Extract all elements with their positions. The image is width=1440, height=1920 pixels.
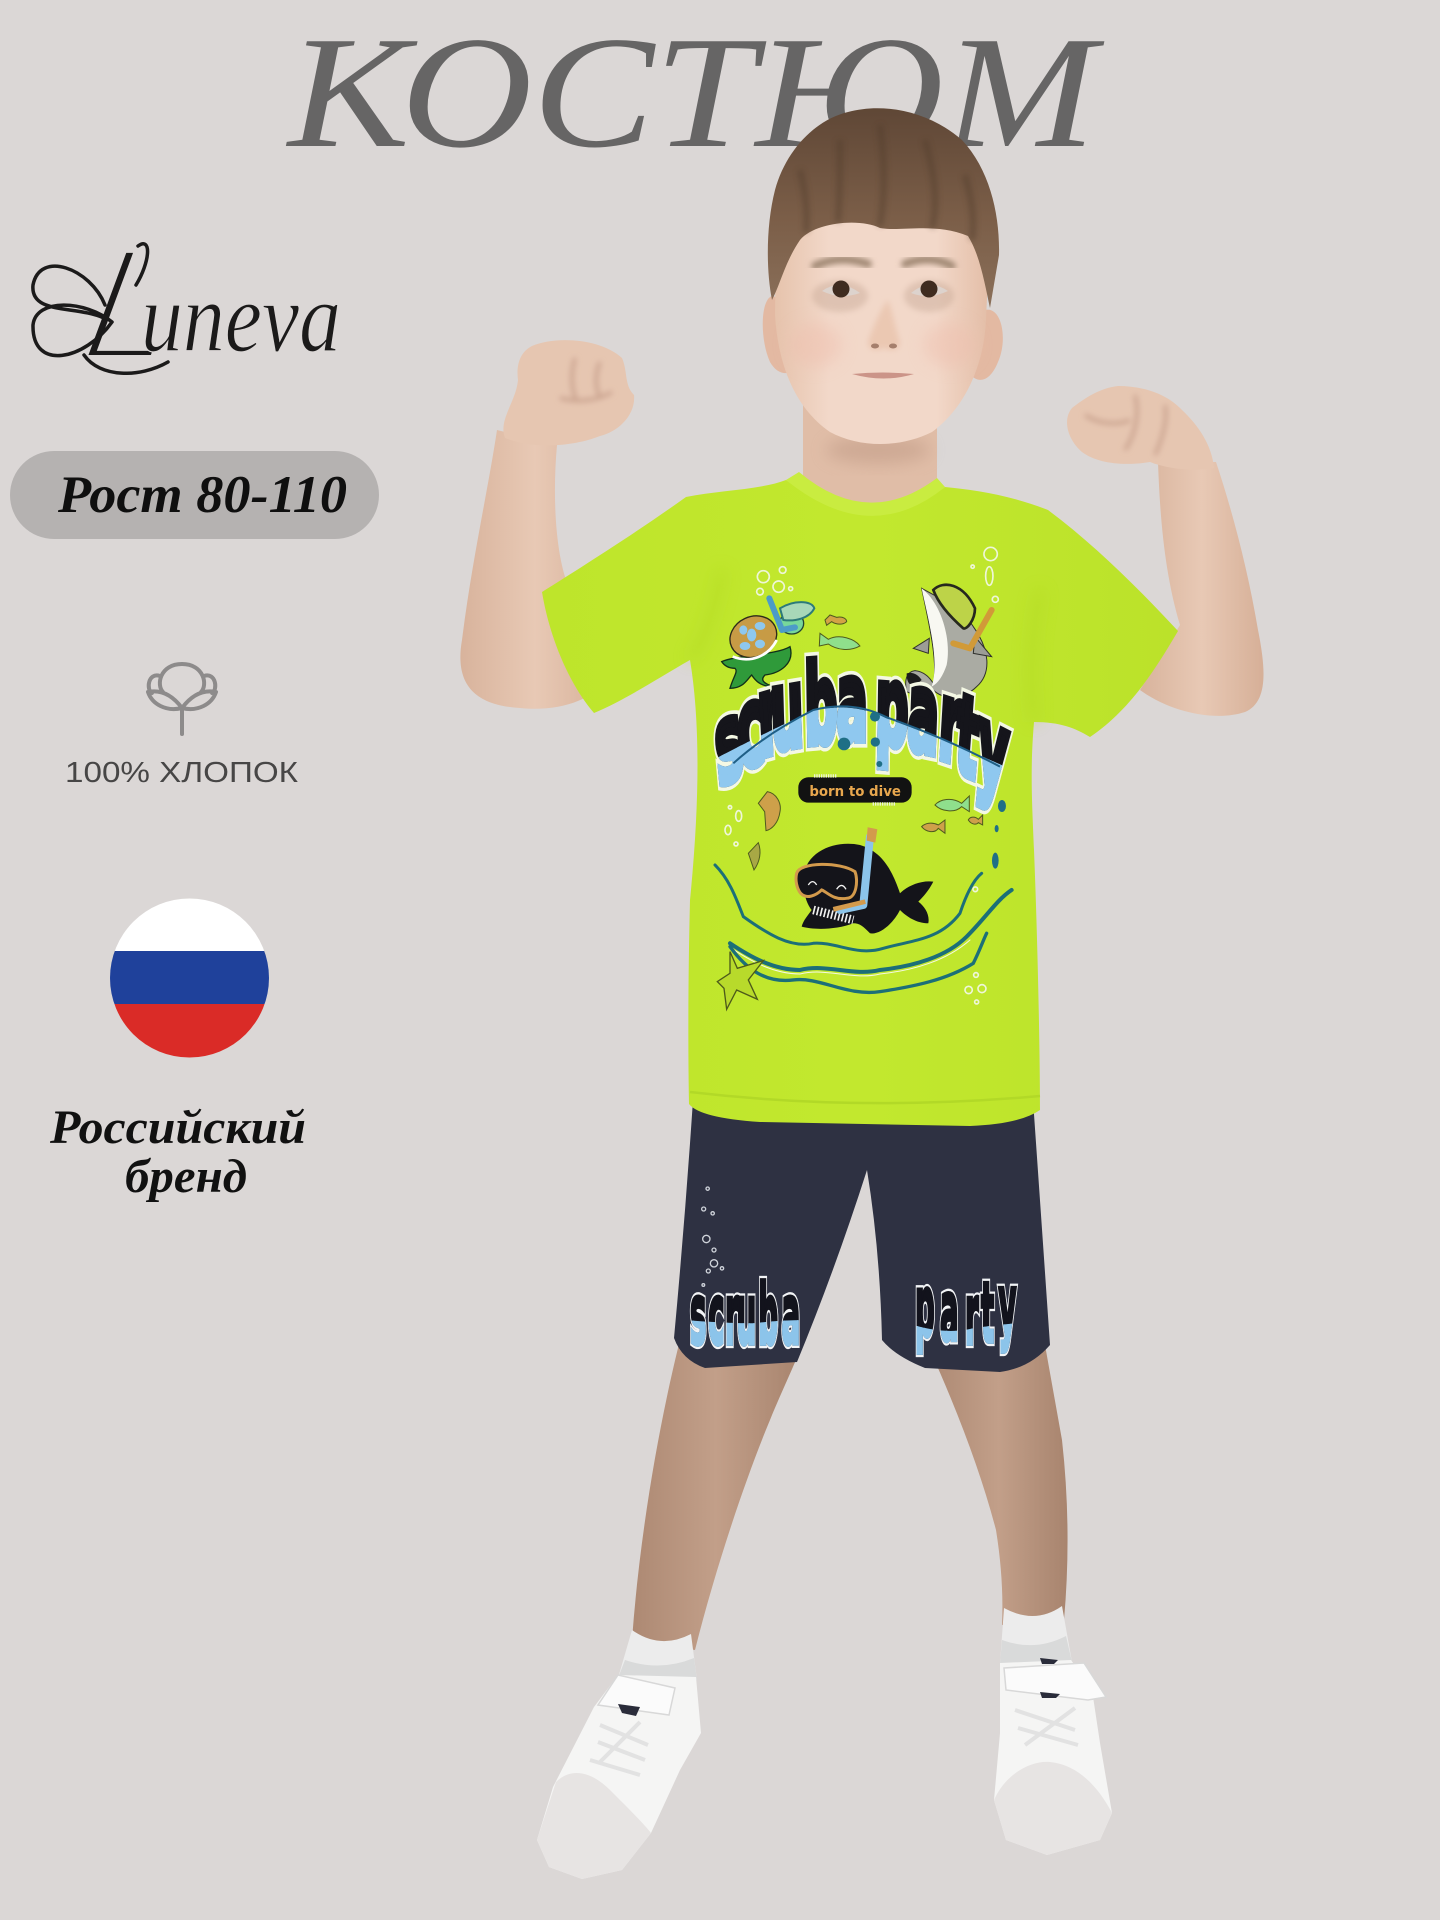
brand logo: Luneva: uneva: [141, 262, 341, 373]
lettering: scruba party: scruba party: [709, 638, 1013, 819]
shorts print: scruba: scruba: [690, 1265, 800, 1363]
brand logo: Luneva: L: [72, 215, 192, 394]
t-shirt: [542, 472, 1178, 1126]
right sock: [1000, 1606, 1072, 1664]
lettering: scruba party: scruba party: [709, 638, 1013, 819]
icon: cotton flower: [148, 664, 216, 734]
hair: [768, 108, 999, 308]
shorts print: party: party: [915, 1255, 1016, 1363]
starfish: [717, 952, 763, 1009]
mouth: [852, 372, 914, 378]
eye sockets: [812, 280, 868, 312]
left arm: [460, 430, 610, 709]
left leg: [632, 1340, 800, 1650]
right arm: [1140, 462, 1264, 716]
icon: russian flag: [110, 898, 269, 1058]
t-shirt collar: [786, 472, 945, 516]
lettering: scruba party: scruba party: [709, 638, 1013, 819]
whale: [796, 827, 933, 933]
shorts: [674, 1100, 1050, 1372]
sleeve shading: [690, 570, 1040, 722]
cheeks: [789, 323, 841, 367]
right leg: [930, 1345, 1068, 1625]
height badge: [10, 451, 379, 539]
cotton label: 100% ХЛОПОК: [65, 757, 298, 789]
waves: [715, 865, 1012, 992]
fish: [748, 615, 983, 870]
left sock: [618, 1630, 697, 1680]
left shoe: [537, 1675, 701, 1879]
russian brand label: [49, 1101, 306, 1203]
hem line: [690, 1092, 1040, 1103]
boy figure: [460, 108, 1264, 1879]
left ear: [763, 296, 796, 373]
height badge: Рост 80-110: [57, 466, 347, 524]
title: КОСТЮМ: [286, 3, 1105, 181]
brand logo: Luneva: [33, 215, 341, 394]
russian brand label: Российский: [49, 1101, 306, 1154]
turtle: [722, 598, 814, 688]
chin shadow: [826, 436, 930, 464]
shorts print: party: party: [915, 1255, 1016, 1363]
right fist: [1067, 386, 1214, 470]
shorts print: scruba: scruba: [690, 1265, 800, 1363]
shorts print: scruba: [690, 1276, 1018, 1358]
shorts print: scruba: scruba: [690, 1265, 800, 1363]
face: [775, 208, 990, 444]
russian brand label: бренд: [125, 1150, 247, 1203]
born to dive badge: [798, 776, 912, 804]
left eye: [822, 280, 860, 298]
shorts print: bubbles: [702, 1187, 724, 1286]
bubbles: [725, 547, 998, 1004]
born to dive badge: born to dive: [809, 784, 901, 800]
right eye: [911, 280, 948, 298]
dolphin: [906, 585, 992, 697]
eyebrows: [815, 259, 868, 266]
neck: [803, 395, 937, 511]
right ear: [970, 310, 1003, 380]
left fist: [503, 340, 634, 445]
shirt print: [709, 547, 1013, 1009]
shorts print: scruba: party: [915, 1255, 1016, 1363]
waterline and drops: [733, 706, 1006, 869]
nose: [868, 300, 900, 350]
right shoe: [994, 1658, 1112, 1855]
